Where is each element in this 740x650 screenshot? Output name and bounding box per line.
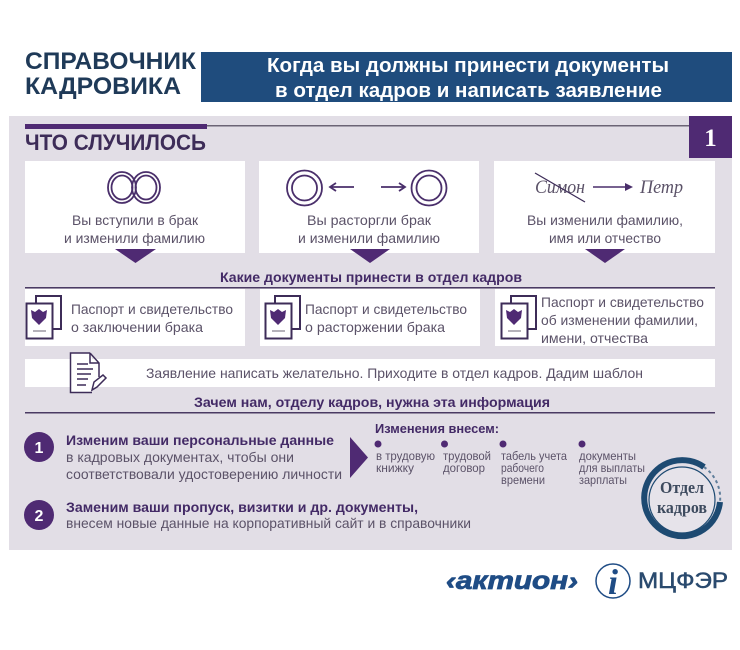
document card: name change certificate: об изменении фамилии, bbox=[541, 312, 698, 328]
logo: MCFER: МЦФЭР bbox=[638, 568, 728, 593]
item: payroll documents bbox=[578, 440, 645, 487]
card: divorce bbox=[259, 161, 479, 263]
changes list: Изменения внесем: bbox=[375, 421, 499, 436]
item: timesheet: рабочего bbox=[501, 461, 544, 475]
brand heading: КАДРОВИКА bbox=[25, 73, 181, 100]
icon: passport and certificate bbox=[26, 296, 61, 338]
number badge 1: 1 bbox=[35, 440, 44, 457]
item: timesheet: табель учета bbox=[501, 449, 567, 463]
title banner: в отдел кадров и написать заявление bbox=[275, 80, 662, 102]
document card: marriage certificate: Паспорт и свидетельство bbox=[71, 301, 233, 317]
item: payroll documents: для выплаты bbox=[579, 461, 645, 475]
card: name change bbox=[494, 161, 715, 263]
item: employment contract: трудовой bbox=[443, 449, 491, 463]
item: payroll documents: документы bbox=[579, 449, 636, 463]
reason 1: соответствовали удостоверению личности bbox=[66, 466, 342, 482]
document card: name change certificate bbox=[495, 289, 715, 346]
changes list bbox=[374, 421, 645, 487]
number tab bbox=[689, 116, 732, 158]
item: work book bbox=[374, 440, 435, 475]
icon: passport and certificate bbox=[502, 296, 536, 338]
document card: divorce certificate bbox=[260, 289, 480, 346]
card: name change: Вы изменили фамилию, bbox=[527, 212, 683, 228]
logo: MCFER: i bbox=[608, 562, 618, 602]
reason 1 bbox=[24, 432, 342, 482]
icon: wedding rings bbox=[108, 172, 160, 203]
document card: name change certificate: имени, отчества bbox=[541, 330, 648, 346]
icon: crossed out name and arrow bbox=[535, 173, 683, 202]
card: divorce: и изменили фамилию bbox=[298, 230, 440, 246]
icon: application with pen bbox=[70, 353, 106, 392]
number badge 1 bbox=[24, 432, 54, 462]
number badge 2: 2 bbox=[35, 508, 44, 525]
icon: crossed out name and arrow: Петр bbox=[639, 177, 683, 198]
number badge 2 bbox=[24, 500, 54, 530]
section heading: what happened bbox=[25, 124, 689, 155]
document card: divorce certificate: Паспорт и свидетельство bbox=[305, 301, 467, 317]
document card: marriage certificate: о заключении брака bbox=[71, 319, 203, 335]
logo: Aktion: ‹актион› bbox=[446, 567, 578, 595]
icon: passport and certificate bbox=[266, 296, 300, 338]
item: employment contract bbox=[441, 440, 491, 475]
document card: marriage certificate bbox=[25, 289, 245, 346]
reason 2 bbox=[24, 499, 471, 531]
document card: name change certificate: Паспорт и свидетельство bbox=[541, 294, 704, 310]
stamp: HR department: Отдел bbox=[660, 478, 704, 497]
brand heading bbox=[25, 48, 196, 100]
statement strip: Заявление написать желательно. Приходите в отдел кадров. Дадим шаблон bbox=[146, 365, 643, 381]
item: timesheet bbox=[500, 440, 567, 487]
item: work book: в трудовую bbox=[376, 449, 435, 463]
reason 2: внесем новые данные на корпоративный сайт и в справочники bbox=[66, 515, 471, 531]
number tab: 1 bbox=[704, 125, 717, 152]
stamp: HR department bbox=[644, 460, 720, 536]
statement strip bbox=[25, 353, 715, 392]
item: payroll documents: зарплаты bbox=[579, 473, 627, 487]
item: timesheet: времени bbox=[501, 473, 545, 487]
title banner bbox=[201, 52, 732, 102]
item: employment contract: договор bbox=[443, 461, 485, 475]
arrow to changes list bbox=[350, 437, 368, 478]
icon: separated rings with arrows bbox=[287, 170, 446, 206]
card: marriage: Вы вступили в брак bbox=[72, 212, 199, 228]
title banner: Когда вы должны принести документы bbox=[267, 55, 669, 77]
panel: main background bbox=[9, 116, 732, 550]
logo: MCFER bbox=[596, 562, 728, 602]
card: divorce: Вы расторгли брак bbox=[307, 212, 432, 228]
reason 1: в кадровых документах, чтобы они bbox=[66, 449, 294, 465]
document card: divorce certificate: о расторжении брака bbox=[305, 319, 445, 335]
brand heading: СПРАВОЧНИК bbox=[25, 48, 196, 75]
subheading: which documents: Какие документы принести в отдел кадров bbox=[220, 269, 522, 285]
card: marriage: и изменили фамилию bbox=[64, 230, 205, 246]
section heading: what happened: ЧТО СЛУЧИЛОСЬ bbox=[25, 130, 206, 155]
subheading: why we need it: Зачем нам, отделу кадров, нужна эта информация bbox=[194, 394, 550, 410]
item: work book: книжку bbox=[376, 461, 414, 475]
card: marriage bbox=[25, 161, 245, 263]
icon: crossed out name and arrow: Симон bbox=[535, 177, 585, 198]
stamp: HR department: кадров bbox=[657, 498, 707, 517]
reason 1: Изменим ваши персональные данные bbox=[66, 432, 334, 448]
reason 2: Заменим ваши пропуск, визитки и др. документы, bbox=[66, 499, 418, 515]
card: name change: имя или отчество bbox=[549, 230, 661, 246]
